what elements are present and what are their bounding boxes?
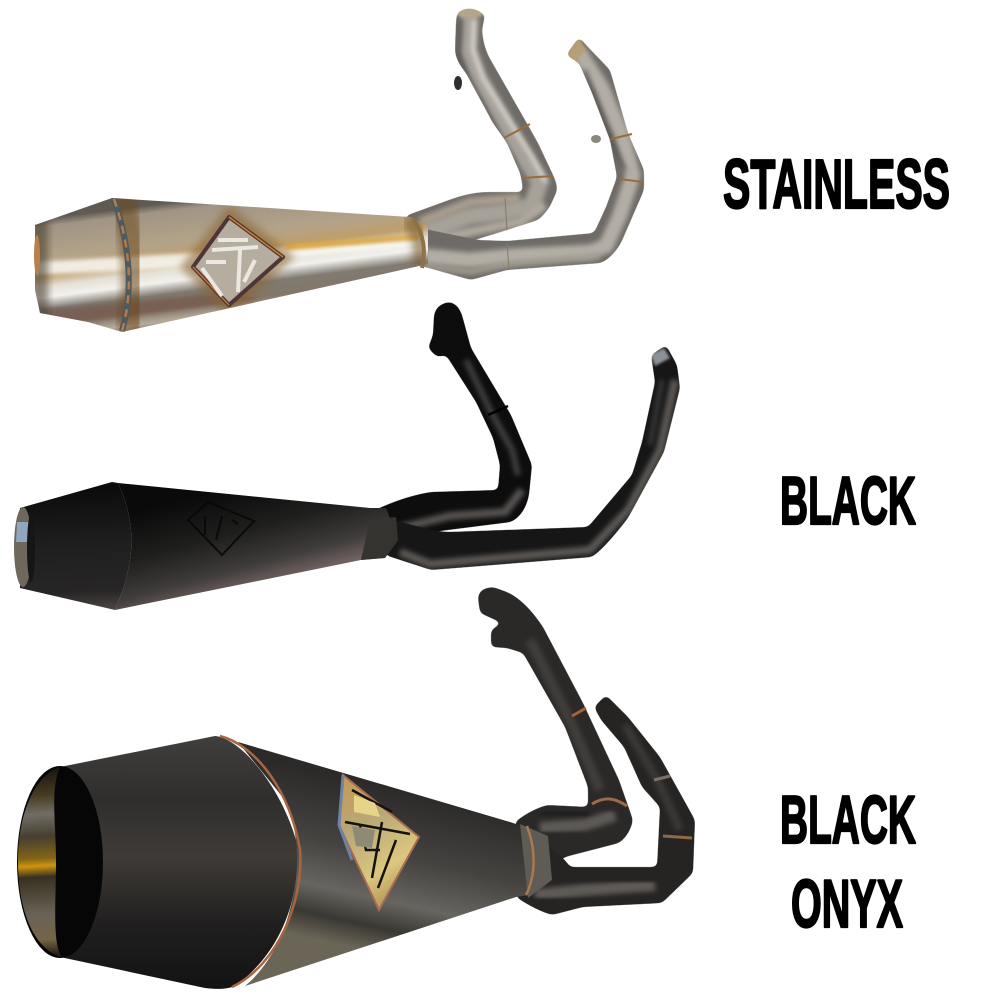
label: black onyx [780,782,916,942]
neck weld [413,218,424,268]
pipe welds [504,124,643,270]
logo diamond [193,217,283,305]
embossed logo [188,502,254,555]
label: black onyx: ONYX [791,866,903,942]
muffler can [60,736,297,989]
product: black exhaust [14,295,690,610]
muffler cone [238,742,530,986]
tail rim [18,767,62,957]
lower header pipe [424,40,644,280]
tail opening [17,766,103,958]
mounting tabs [454,76,462,90]
can edge weld [220,736,300,987]
tail opening [14,507,32,587]
upper header pipe [478,587,632,858]
product: stainless exhaust [30,0,650,340]
tail opening [34,235,40,275]
can weld bead [114,199,129,331]
muffler cone [115,483,398,610]
upper header pipe [380,302,532,532]
lower header pipe [517,697,695,914]
muffler body [35,198,428,332]
upper header pipe [406,8,557,240]
lower header pipe [387,347,680,570]
neck [520,824,552,898]
neck [361,517,398,560]
pipe joint [488,406,508,415]
product: black onyx exhaust [17,580,700,989]
pipe welds [572,708,692,838]
logo gem [339,775,419,910]
muffler can [20,482,131,610]
